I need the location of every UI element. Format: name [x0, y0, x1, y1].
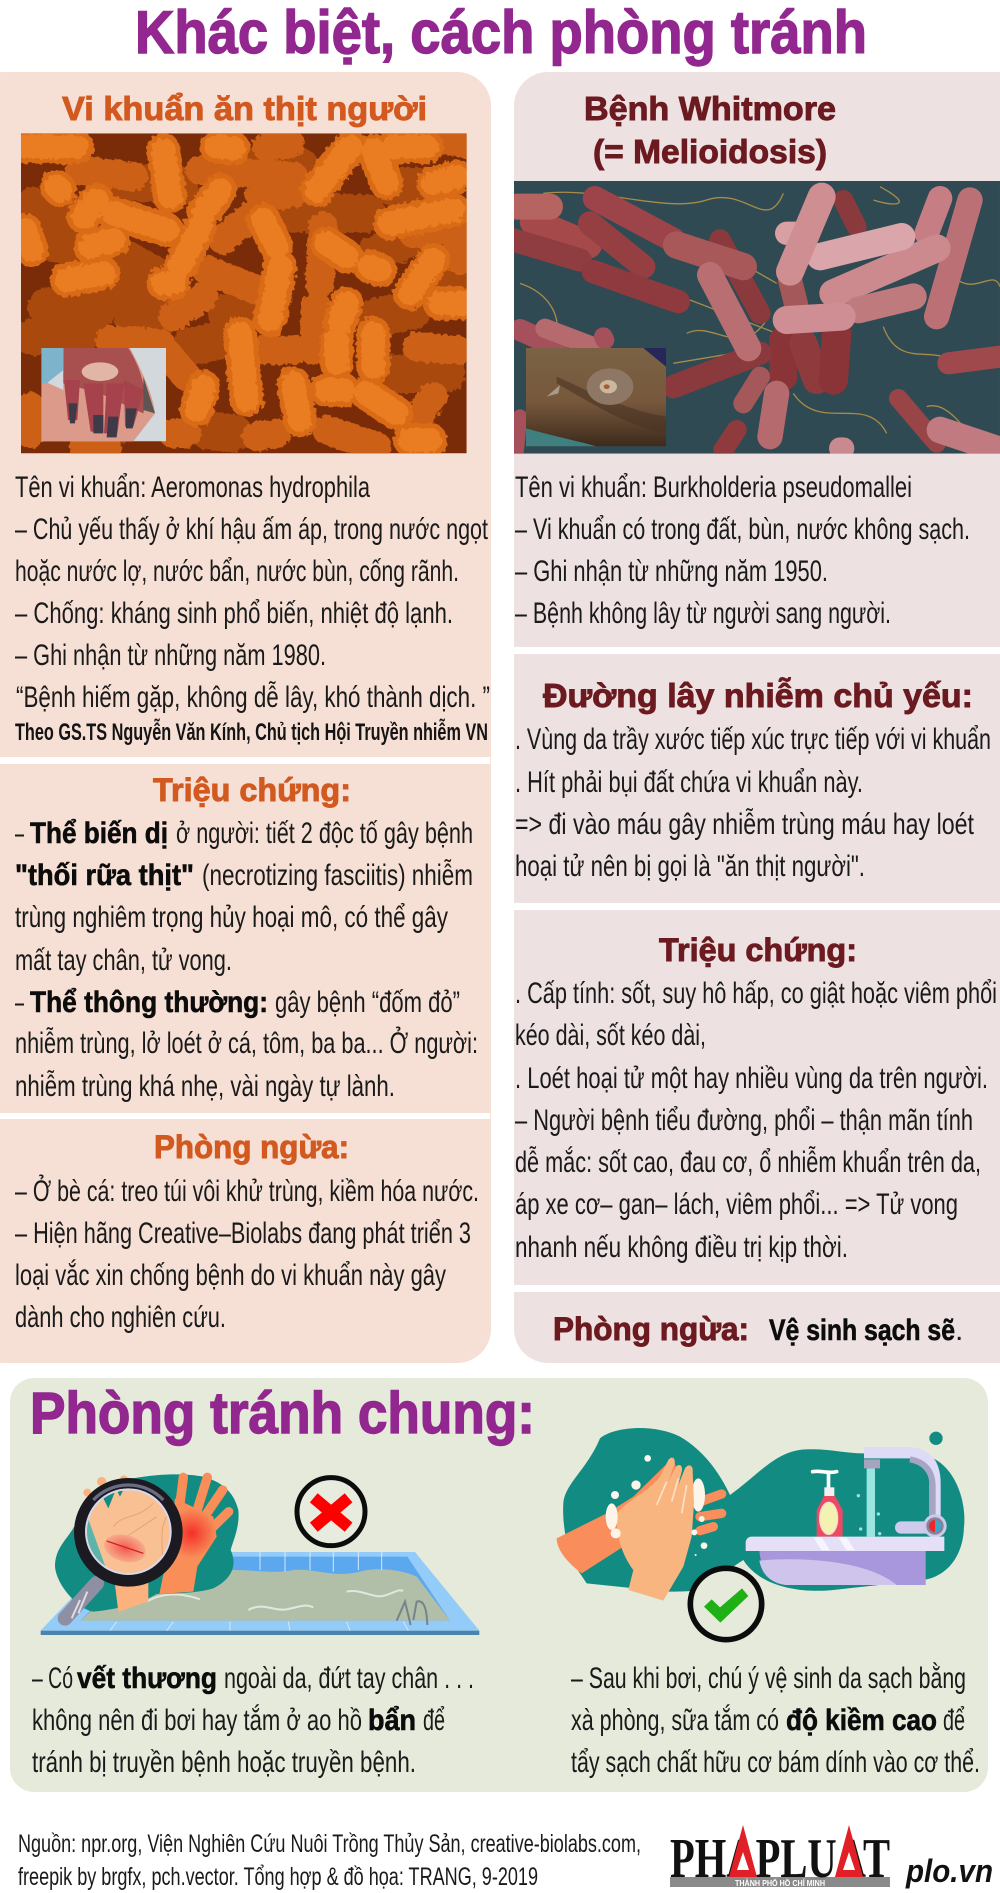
text: symptoms (left): nhiễm trùng, lở loét ở cá, tôm, ba ba... Ở người: [15, 1026, 478, 1060]
icon: green check in circle [690, 1568, 762, 1640]
text: pool warning: ngoài da, đứt tay chân . . . [224, 1662, 474, 1695]
magnifying glass [65, 1478, 183, 1618]
text: prevention (left): – Hiện hãng Creative–Biolabs đang phát triển 3 [15, 1217, 471, 1250]
source credits: freepik by brgfx, pch.vector. Tổng hợp & đồ họa: TRANG, 9-2019 [18, 1863, 538, 1891]
soap bottle [813, 1471, 843, 1537]
illustration: dirty pool and wounded hand [41, 1474, 479, 1635]
text: prevention (left) [15, 1174, 479, 1334]
text: bacteria description: Theo GS.TS Nguyễn Văn Kính, Chủ tịch Hội Truyền nhiễm VN [15, 718, 488, 746]
text: pool warning: không nên đi bơi hay tắm ở ao hồ [32, 1704, 362, 1737]
text: symptoms (right) [515, 977, 997, 1264]
text: symptoms (left): "thối rữa thịt" [15, 859, 194, 892]
panel: general prevention [10, 1378, 988, 1792]
text: symptoms (left): trùng nghiêm trọng hủy hoại mô, có thể gây [15, 901, 448, 934]
text: washing advice: xà phòng, sữa tắm có [571, 1704, 779, 1737]
prevention line (right): . [955, 1314, 963, 1347]
icon: red cross in circle [297, 1478, 365, 1546]
text: symptoms (left) [15, 817, 478, 1103]
text: transmission: hoại tử nên bị gọi là "ăn thịt người". [515, 850, 865, 883]
text: bacteria description: hoặc nước lợ, nước bẩn, nước bùn, cống rãnh. [15, 555, 459, 588]
text: transmission [515, 723, 991, 883]
panel: right, Whitmore disease [513, 72, 1000, 1363]
text: Burkholderia description [515, 471, 970, 630]
logo text: plo.vn: plo.vn [905, 1853, 993, 1889]
prevention line (right): Phòng ngừa: [553, 1311, 749, 1347]
inset photo: infected hand [41, 348, 166, 441]
text: pool warning: tránh bị truyền bệnh hoặc truyền bệnh. [32, 1746, 416, 1779]
title: Khác biệt, cách phòng tránh [135, 0, 867, 66]
illustration: hand washing and sink [557, 1428, 964, 1601]
heading: Bệnh Whitmore: (= Melioidosis) [593, 133, 827, 170]
text: prevention (left): dành cho nghiên cứu. [15, 1301, 226, 1334]
heading: Phòng ngừa (left): Phòng ngừa: [154, 1129, 349, 1165]
text: bacteria description: – Chủ yếu thấy ở khí hậu ấm áp, trong nước ngọt [15, 513, 488, 546]
logo: Pháp Luật: PHAPLUAT [670, 1828, 890, 1890]
text: bacteria description: – Chống: kháng sinh phổ biến, nhiệt độ lạnh. [15, 597, 453, 630]
text: pool warning [32, 1662, 474, 1779]
heading: Triệu chứng (right): Triệu chứng: [659, 932, 857, 968]
prevention line (right) [553, 1311, 963, 1347]
heading: Bệnh Whitmore [584, 90, 836, 170]
text: washing advice: để [943, 1704, 965, 1737]
logo: Pháp Luật: THÀNH PHỐ HỒ CHÍ MINH [735, 1878, 825, 1888]
heading: Phòng tránh chung: Phòng tránh chung: [30, 1381, 535, 1446]
heading: Bệnh Whitmore: Bệnh Whitmore [584, 90, 836, 127]
source credits: Nguồn: npr.org, Viện Nghiên Cứu Nuôi Trồng Thủy Sản, creative-biolabs.com, [18, 1830, 641, 1858]
text: symptoms (left): – [15, 817, 24, 850]
text: bacteria description: “Bệnh hiếm gặp, không dễ lây, khó thành dịch. ” [16, 681, 490, 714]
text: transmission: . Hít phải bụi đất chứa vi khuẩn này. [515, 766, 863, 799]
heading: Đường lây nhiễm chủ yếu: Đường lây nhiễm chủ yếu: [543, 677, 973, 714]
text: symptoms (left): gây bệnh “đốm đỏ” [275, 986, 460, 1019]
text: symptoms (left): (necrotizing fasciitis) nhiễm [202, 859, 473, 892]
text: washing advice [571, 1662, 980, 1779]
text: bacteria description: – Ghi nhận từ những năm 1980. [15, 639, 326, 672]
inset photo: skin lesion [526, 348, 666, 446]
text: pool warning: để [423, 1704, 445, 1737]
text: symptoms (left): Thể biến dị [30, 817, 168, 850]
text: prevention (left): loại vắc xin chống bệnh do vi khuẩn này gây [15, 1259, 446, 1292]
text: symptoms (right): kéo dài, sốt kéo dài, [515, 1019, 706, 1052]
text: washing advice: độ kiềm cao [786, 1704, 937, 1737]
text: symptoms (right): nhanh nếu không điều trị kịp thời. [515, 1231, 848, 1264]
teal blob [55, 1474, 239, 1612]
text: symptoms (left): ở người: tiết 2 độc tố gây bệnh [176, 817, 473, 850]
hands [557, 1455, 722, 1601]
panel: left, flesh-eating bacteria [0, 72, 491, 1363]
wounded hand [83, 1475, 229, 1612]
tap and sink [746, 1453, 947, 1585]
text: symptoms (left): mất tay chân, tử vong. [15, 944, 232, 977]
source credits [18, 1830, 641, 1891]
prevention line (right): Vệ sinh sạch sẽ [769, 1314, 955, 1347]
text: symptoms (left): Thể thông thường: [30, 986, 268, 1019]
text: bacteria description: Tên vi khuẩn: Aeromonas hydrophila [15, 471, 370, 504]
text: prevention (left): – Ở bè cá: treo túi vôi khử trùng, kiềm hóa nước. [15, 1174, 479, 1208]
heading: Vi khuẩn ăn thịt người: Vi khuẩn ăn thịt người [62, 90, 427, 127]
text: bacteria description [15, 471, 490, 746]
text: symptoms (left): – [15, 986, 24, 1019]
text: pool warning: – Có [32, 1662, 73, 1695]
logo: Pháp Luật [670, 1825, 890, 1890]
text: pool warning: bẩn [368, 1704, 416, 1737]
text: symptoms (left): nhiễm trùng khá nhẹ, vài ngày tự lành. [15, 1070, 395, 1103]
text: Burkholderia description: – Ghi nhận từ những năm 1950. [515, 555, 828, 588]
photo: pink bacteria [513, 181, 1000, 454]
text: pool warning: vết thương [77, 1662, 217, 1695]
photo: orange bacteria [21, 133, 467, 453]
heading: Triệu chứng (left): Triệu chứng: [153, 772, 351, 808]
